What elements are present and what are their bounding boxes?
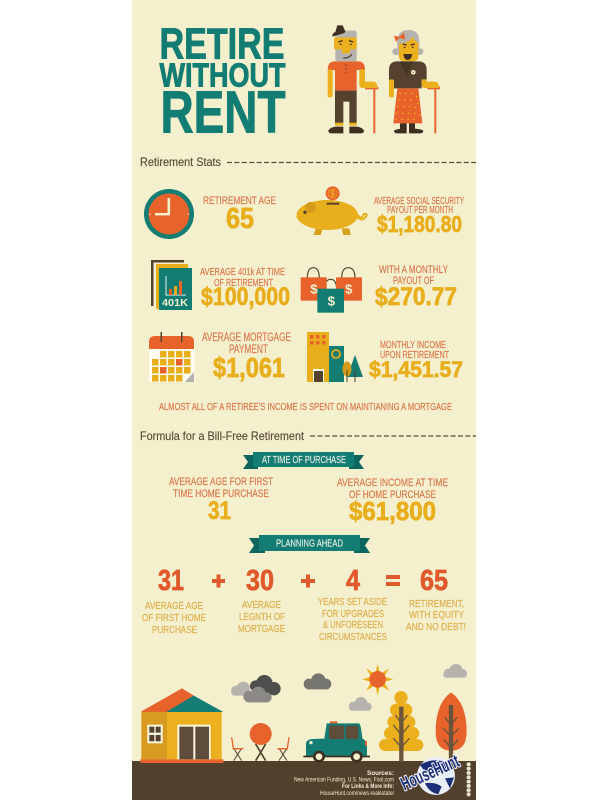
- scene: sky and patio: [231, 673, 372, 763]
- illustration: retired couple: [328, 25, 440, 133]
- heading: Retirement Stats: Retirement Stats: [140, 155, 221, 169]
- formula: 31 + 30 + 4 = 65: 65: [420, 565, 448, 597]
- label: retirement with equity: RETIREMENT,: [409, 598, 464, 610]
- sources text: [294, 770, 394, 797]
- label: years set aside: YEARS SET ASIDE: [318, 596, 387, 608]
- label: years set aside: CIRCUMSTANCES: [319, 631, 387, 643]
- callout: mortgage note: ALMOST ALL OF A RETIREE'S INCOME IS SPENT ON MAINTIANING A MORTGAGE: [159, 402, 452, 413]
- stat: income at purchase: [337, 477, 448, 526]
- stat: mortgage payment: [202, 332, 291, 383]
- icon: 401k documents: [151, 260, 192, 310]
- stat: mortgage payment: PAYMENT: [229, 344, 268, 356]
- stat: first home age: TIME HOME PURCHASE: [173, 488, 269, 500]
- icon: orange tree: [436, 692, 467, 762]
- icon: grey cloud: [304, 673, 331, 689]
- background panel: [132, 0, 476, 800]
- icon: piggy bank: $: [330, 189, 335, 199]
- icon: light cloud: [349, 697, 372, 711]
- icon: piggy bank: [296, 186, 367, 235]
- scene: trees and far cloud: [379, 664, 471, 797]
- stat: income at purchase: $61,800: [349, 496, 436, 526]
- icon: shopping bags: $: [345, 281, 353, 296]
- stat: monthly payout: [375, 264, 457, 311]
- stat: social security payout: [374, 196, 464, 237]
- title: RETIRE: [160, 20, 284, 68]
- label: average length of mortgage: AVERAGE: [242, 599, 281, 611]
- label: average length of mortgage: LEGNTH OF: [239, 611, 285, 623]
- stat: average 401k: AVERAGE 401k AT TIME: [200, 266, 285, 278]
- icon: shopping bags: $: [310, 281, 318, 296]
- stat: social security payout: PAYOUT PER MONTH: [387, 205, 453, 216]
- icon: car: [303, 721, 370, 763]
- label: years set aside: FOR UPGRADES: [322, 608, 384, 620]
- stat: monthly income: $1,451.57: [369, 357, 463, 382]
- label: average age of first home purchase: [142, 600, 206, 636]
- label: average length of mortgage: [238, 599, 285, 635]
- stat: monthly payout: $270.77: [375, 283, 457, 311]
- label: average age of first home purchase: PURCHASE: [152, 624, 197, 636]
- label: average length of mortgage: MORTGAGE: [238, 623, 285, 635]
- icon: grandfather: [328, 25, 378, 133]
- stat: first home age: [169, 476, 273, 525]
- stat: social security payout: AVERAGE SOCIAL SECURITY: [374, 196, 464, 207]
- sources text: New American Funding, U.S. News, Fool.com: [294, 776, 394, 784]
- stat: monthly payout: PAYOUT OF: [393, 275, 434, 287]
- ribbon: planning ahead: PLANNING AHEAD: [276, 538, 343, 550]
- icon: patio chair left: [232, 737, 243, 761]
- icon: grandmother: [389, 30, 440, 133]
- formula: 31 + 30 + 4 = 65: [158, 565, 448, 597]
- icon: patio table: [250, 723, 272, 761]
- stat: monthly payout: WITH A MONTHLY: [379, 264, 448, 276]
- icon: calendar: [149, 332, 194, 382]
- label: retirement with equity: [406, 598, 466, 633]
- stat: retirement age: 65: [226, 203, 254, 235]
- stat: income at purchase: AVERAGE INCOME AT TIME: [337, 477, 448, 489]
- icon: yellow tree: [379, 691, 423, 762]
- icon: storm clouds: [231, 675, 281, 702]
- icon: patio chair right: [277, 737, 289, 761]
- label: years set aside: & UNFORESEEN: [323, 619, 383, 631]
- icon: clock: [144, 189, 194, 239]
- label: retirement with equity: WITH EQUITY: [409, 609, 464, 621]
- stat: monthly income: MONTHLY INCOME: [380, 340, 446, 351]
- stat: monthly income: UPON RETIREMENT: [380, 350, 449, 361]
- label: average age of first home purchase: OF FIRST HOME: [142, 612, 206, 624]
- icon: sun: [362, 664, 393, 695]
- formula: 31 + 30 + 4 = 65: 31: [158, 565, 184, 597]
- formula: 31 + 30 + 4 = 65: 4: [346, 565, 360, 597]
- label: average age of first home purchase: AVERAGE AGE: [145, 600, 203, 612]
- decorative bead strip: [466, 762, 471, 797]
- formula: 31 + 30 + 4 = 65: 30: [246, 565, 274, 597]
- label: retirement with equity: AND NO DEBT!: [406, 621, 466, 633]
- icon: buildings and trees: [307, 332, 363, 382]
- stat: mortgage payment: AVERAGE MORTGAGE: [202, 332, 291, 344]
- title: [160, 20, 286, 146]
- icon: shopping bags: [301, 268, 362, 313]
- heading: Formula for a Bill-Free Retirement: Formula for a Bill-Free Retirement: [140, 429, 305, 443]
- icon: house: [140, 688, 223, 763]
- stat: monthly income: [369, 340, 463, 382]
- sources text: For Links & More Info:: [342, 783, 394, 790]
- ground band: [132, 761, 476, 800]
- ribbon: at time of purchase: [243, 452, 364, 469]
- label: years set aside: [318, 596, 387, 643]
- stat: average 401k: $100,000: [201, 283, 290, 311]
- icon: shopping bags: $: [328, 293, 336, 308]
- stat: mortgage payment: $1,061: [213, 352, 285, 383]
- icon: 401k documents: 401K: [162, 298, 189, 309]
- ribbon: at time of purchase: AT TIME OF PURCHASE: [262, 455, 346, 466]
- stat: average 401k: OF RETIREMENT: [214, 277, 273, 289]
- stat: retirement age: [203, 195, 276, 235]
- stat: first home age: AVERAGE AGE FOR FIRST: [169, 476, 273, 488]
- ribbon: planning ahead: [249, 535, 370, 553]
- sources text: HouseHunt.com/news-realestate/: [320, 790, 394, 797]
- stat: social security payout: $1,180.80: [377, 211, 462, 237]
- title: RENT: [160, 80, 286, 146]
- stat: income at purchase: OF HOME PURCHASE: [349, 489, 436, 501]
- icon: far cloud: [443, 664, 467, 678]
- stat: first home age: 31: [208, 497, 231, 525]
- stat: retirement age: RETIREMENT AGE: [203, 195, 276, 207]
- title: WITHOUT: [160, 56, 286, 94]
- sources text: Sources:: [367, 770, 394, 777]
- logo: HouseHunt globe: HouseHunt: [397, 750, 462, 794]
- stat: average 401k: [200, 266, 290, 311]
